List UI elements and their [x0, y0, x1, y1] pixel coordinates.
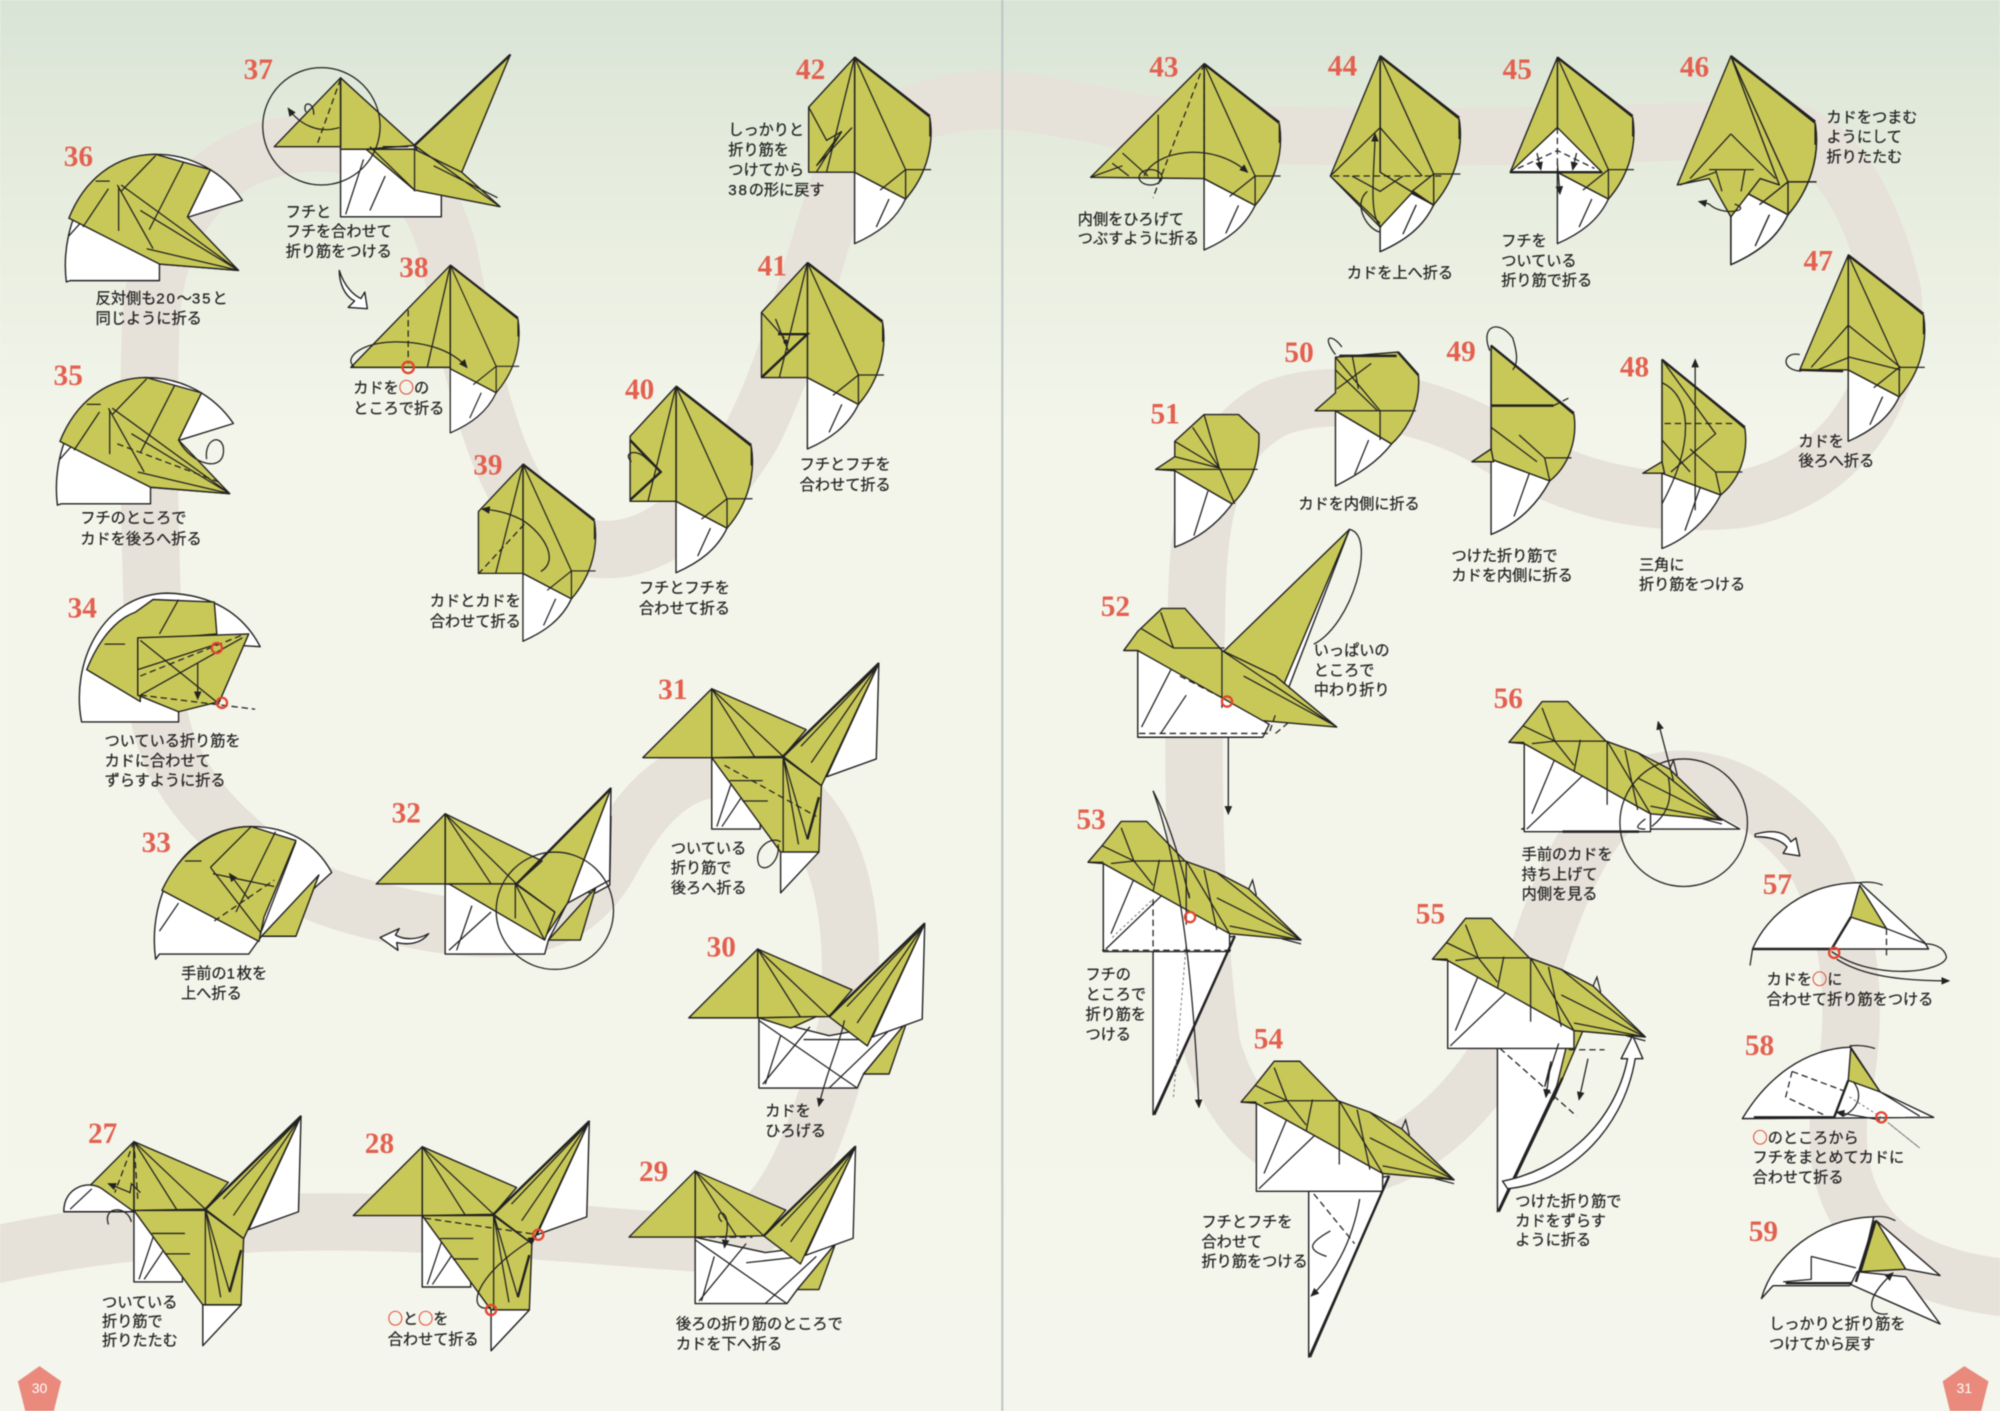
step 58 [1742, 1030, 1934, 1186]
step 40: 40 [625, 374, 654, 406]
step 52 [1101, 529, 1390, 814]
step 56 [1494, 683, 1800, 903]
winding road: right page [995, 100, 2000, 1288]
step 54: 54 [1254, 1023, 1283, 1055]
step 34: 34 [68, 592, 97, 624]
step 42: 42 [796, 54, 825, 86]
step 55: カドをずらす [1515, 1213, 1606, 1230]
step 57: 57 [1763, 869, 1792, 901]
step 27: 折り筋で [102, 1314, 163, 1331]
step 57: 合わせて折り筋をつける [1767, 991, 1933, 1008]
step 55: ように折る [1515, 1232, 1591, 1249]
step 32: 32 [392, 798, 421, 830]
step 43: 内側をひろげて [1078, 212, 1184, 229]
step 53 [1077, 791, 1301, 1115]
step 37: フチを合わせて [286, 224, 392, 241]
step 52: いっぱいの [1314, 643, 1390, 660]
page number 31: 31 [1956, 1380, 1972, 1396]
step 31: 31 [658, 674, 687, 706]
page number 30: 30 [32, 1380, 48, 1396]
step 55: つけた折り筋で [1515, 1194, 1621, 1211]
step 52: ところで [1314, 662, 1374, 679]
step 42: 折り筋を [728, 142, 789, 159]
step 59 [1749, 1216, 1940, 1353]
step 47 [1786, 245, 1925, 470]
step 51: 51 [1151, 398, 1180, 430]
step 28: ○と○を [388, 1307, 448, 1329]
arrow: next step [339, 270, 367, 309]
step 46: ようにして [1827, 129, 1902, 146]
step 48: 48 [1620, 351, 1649, 383]
winding road: left page [0, 100, 1008, 1256]
step 29: 29 [639, 1156, 668, 1188]
step 44: 44 [1328, 50, 1357, 82]
step 29 [629, 1146, 856, 1353]
step 35: フチのところで [80, 510, 186, 527]
arrow: curved rotate [1503, 1036, 1643, 1189]
step 31: ついている [671, 840, 746, 857]
step 57: カドを○に [1767, 968, 1842, 990]
step 39: カドとカドを [430, 593, 521, 610]
step 59: 59 [1749, 1216, 1778, 1248]
step 38: 38 [399, 252, 429, 284]
step 47: 47 [1804, 245, 1833, 277]
step 58: フチをまとめてカドに [1753, 1150, 1904, 1167]
step 46: カドをつまむ [1827, 109, 1917, 126]
step 46: 折りたたむ [1827, 149, 1902, 166]
step 30: カドを [765, 1103, 811, 1120]
step 36: 同じように折る [96, 310, 202, 327]
step 30 [689, 923, 925, 1140]
step 38: ところで折る [353, 400, 444, 417]
step 35: カドを後ろへ折る [80, 531, 202, 548]
step 45: 45 [1503, 54, 1532, 86]
step 53: フチの [1085, 967, 1131, 984]
step 45: フチを [1501, 233, 1547, 250]
step 37: 折り筋をつける [286, 243, 392, 260]
step 47: カドを [1798, 433, 1844, 450]
step 27 [64, 1116, 301, 1350]
step 55 [1416, 898, 1645, 1249]
step 59: つけてから戻す [1769, 1336, 1875, 1353]
step 41: フチとフチを [800, 456, 891, 473]
step 37: 37 [244, 54, 273, 86]
step 57 [1750, 869, 1949, 1008]
step 34: カドに合わせて [105, 753, 211, 770]
step 31: 折り筋で [671, 860, 732, 877]
step 54: 合わせて [1202, 1234, 1262, 1251]
step 43 [1078, 52, 1281, 250]
step 28 [353, 1121, 589, 1351]
step 52: 中わり折り [1314, 682, 1390, 699]
step 42: 38の形に戻す [728, 182, 825, 199]
step 49 [1446, 327, 1575, 584]
step 46: 46 [1680, 52, 1709, 84]
page gutter [1001, 0, 1003, 1411]
step 53: ところで [1085, 987, 1146, 1004]
step 38 [351, 252, 519, 433]
step 41: 合わせて折る [800, 477, 891, 494]
step 43: つぶすように折る [1078, 231, 1199, 248]
step 31: 後ろへ折る [671, 880, 747, 897]
step 27: ついている [102, 1294, 177, 1311]
step 42: しっかりと [728, 122, 804, 139]
step 49: つけた折り筋で [1452, 548, 1558, 565]
page number 31 [1943, 1366, 1989, 1411]
step 43: 43 [1149, 52, 1179, 84]
step 27: 27 [88, 1118, 117, 1150]
step 40: フチとフチを [639, 580, 730, 597]
step 39 [430, 450, 596, 641]
step 36: 36 [64, 141, 93, 173]
step 37 [244, 54, 510, 309]
step 36: 反対側も20～35と [96, 291, 228, 308]
step 45 [1501, 54, 1634, 290]
step 56: 内側を見る [1522, 886, 1597, 903]
step 34: ずらすように折る [105, 773, 226, 790]
step 42: つけてから [728, 162, 804, 179]
step 45: ついている [1501, 253, 1577, 270]
step 41 [758, 251, 891, 494]
step 54: フチとフチを [1202, 1214, 1292, 1231]
step 37: フチと [286, 204, 331, 221]
step 58: ○のところから [1753, 1126, 1859, 1148]
step 52: 52 [1101, 591, 1130, 623]
step 50: 50 [1284, 337, 1314, 369]
step 30: 30 [707, 932, 736, 964]
step 54: 折り筋をつける [1202, 1254, 1308, 1271]
step 33: 33 [142, 827, 171, 859]
step 50 [1284, 337, 1420, 513]
step 55: 55 [1416, 898, 1445, 930]
step 29: カドを下へ折る [676, 1336, 782, 1353]
step 35: 35 [54, 360, 83, 392]
step 33 [142, 827, 332, 1003]
step 46 [1677, 52, 1917, 265]
page number 30 [18, 1366, 61, 1411]
step 28: 28 [365, 1128, 394, 1160]
step 53: つける [1085, 1026, 1131, 1043]
step 33: 手前の1枚を [181, 965, 267, 982]
step 56: 56 [1494, 683, 1523, 715]
step 56: 持ち上げて [1522, 866, 1597, 883]
step 31 [643, 663, 879, 897]
step 30: ひろげる [765, 1123, 826, 1140]
step 32 [376, 788, 614, 969]
step 27: 折りたたむ [102, 1333, 178, 1350]
step 48: 折り筋をつける [1639, 576, 1745, 593]
step 40: 合わせて折る [639, 601, 730, 618]
step 34: ついている折り筋を [105, 733, 241, 750]
step 59: しっかりと折り筋を [1769, 1316, 1906, 1333]
step 53: 53 [1077, 804, 1106, 836]
step 44: カドを上へ折る [1347, 265, 1453, 282]
step 34 [68, 592, 260, 790]
step 56: 手前のカドを [1522, 847, 1613, 864]
step 28: 合わせて折る [388, 1331, 479, 1348]
step 53: 折り筋を [1085, 1006, 1146, 1023]
step 42 [728, 54, 931, 244]
step 33: 上へ折る [181, 986, 242, 1003]
step 48: 三角に [1639, 557, 1685, 574]
arrow: next step [380, 929, 429, 950]
step 36 [64, 141, 242, 327]
step 41: 41 [758, 251, 787, 283]
step 54 [1202, 1023, 1454, 1357]
step 44 [1328, 50, 1460, 282]
step 38: カドを○の [353, 376, 429, 398]
step 45: 折り筋で折る [1501, 273, 1592, 290]
step 49: 49 [1446, 336, 1476, 368]
step 49: カドを内側に折る [1452, 567, 1573, 584]
step 39: 合わせて折る [430, 613, 521, 630]
step 47: 後ろへ折る [1798, 453, 1874, 470]
step 51 [1151, 398, 1259, 547]
step 40 [625, 374, 753, 618]
step 58: 58 [1745, 1030, 1774, 1062]
step 35 [54, 360, 233, 548]
step 29: 後ろの折り筋のところで [676, 1316, 843, 1333]
step 50: カドを内側に折る [1298, 496, 1420, 513]
arrow: next step [1755, 832, 1800, 856]
step 39: 39 [473, 450, 503, 482]
step 48 [1620, 351, 1746, 593]
step 58: 合わせて折る [1753, 1169, 1844, 1186]
